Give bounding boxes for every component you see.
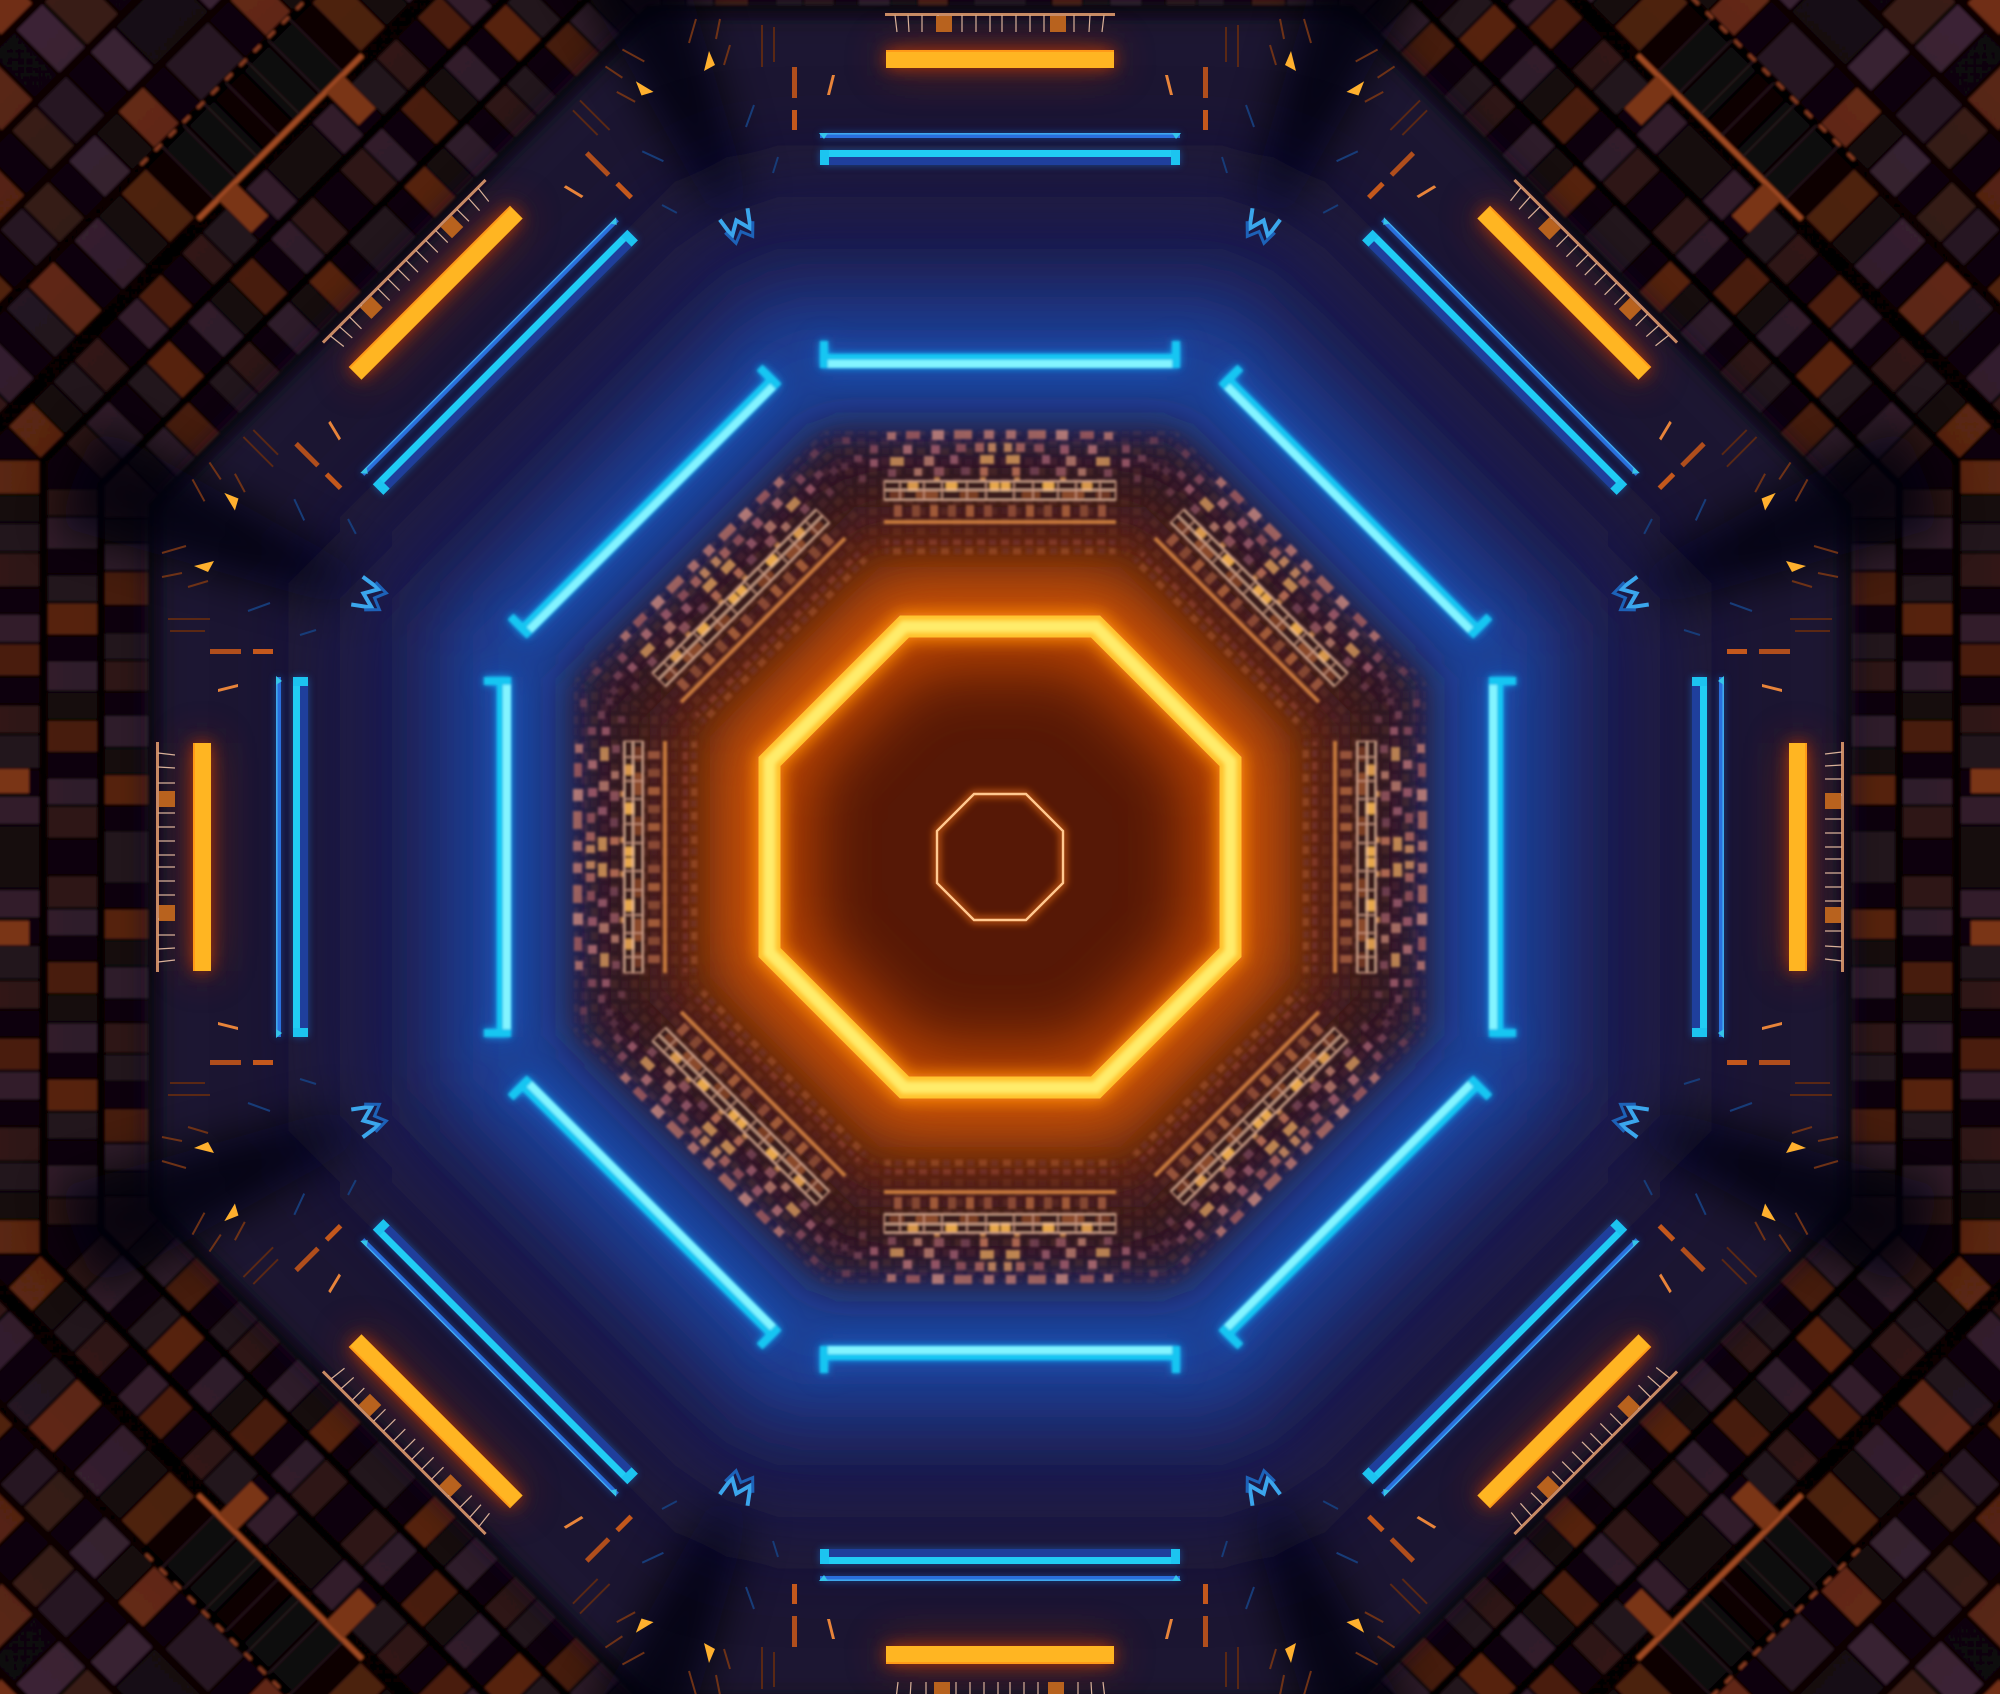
central octagon hot core	[770, 626, 1230, 1088]
inner cyan bar glow	[484, 341, 1516, 1373]
orange bar wide warm glow	[193, 50, 1807, 1664]
small centre octagon outline	[937, 794, 1063, 920]
outer blue bar glow	[276, 133, 1724, 1581]
outer orange neon bars	[193, 50, 1807, 1664]
blue corner glints	[343, 200, 1657, 1514]
warm orange ambient glow	[650, 507, 1350, 1207]
central neon orange octagon	[770, 626, 1230, 1088]
dark chip ring	[570, 427, 1430, 1287]
central octagon inner glow	[770, 626, 1230, 1088]
outer double blue neon bars	[276, 133, 1724, 1581]
central octagon halo	[770, 626, 1230, 1088]
blue ambient glow	[340, 197, 1660, 1517]
orange bar glow	[193, 50, 1807, 1664]
chip panels with ladders and dots	[573, 430, 1427, 1284]
inner cyan neon bars	[484, 341, 1516, 1373]
central octagon interior	[769, 626, 1231, 1088]
small centre octagon glow	[937, 794, 1063, 920]
